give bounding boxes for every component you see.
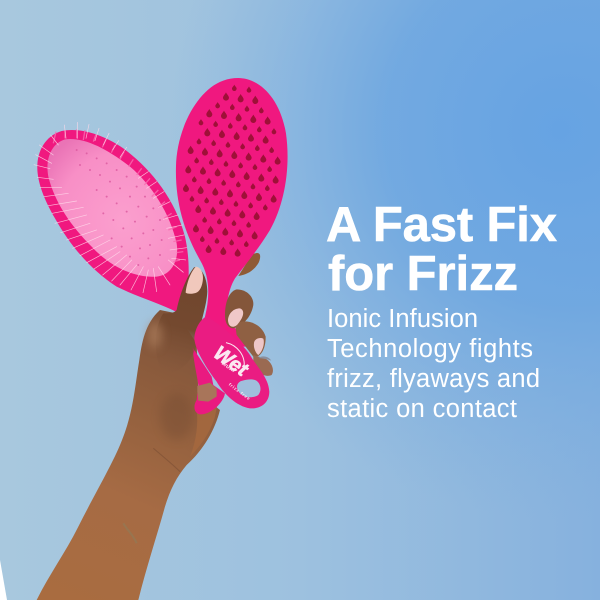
body text: static on contact bbox=[327, 395, 517, 423]
brand logo bbox=[209, 342, 253, 402]
headline: for Frizz bbox=[328, 247, 518, 301]
large vent holes bbox=[183, 92, 281, 257]
left brush handle and loop bbox=[193, 347, 225, 414]
fingernails bbox=[228, 308, 271, 361]
brand logo: brush bbox=[220, 361, 236, 375]
arm and palm bbox=[37, 310, 220, 600]
rim notches bbox=[53, 129, 183, 262]
body text: frizz, flyaways and bbox=[327, 365, 540, 393]
finger behind brush head bbox=[238, 253, 260, 276]
hand and held brushes bbox=[34, 78, 288, 600]
brush: bristle side bbox=[34, 122, 189, 312]
cushion bbox=[47, 139, 177, 277]
brand logo: frizz free bbox=[228, 382, 252, 402]
body text: Ionic Infusion bbox=[327, 305, 478, 333]
brush: vented side bbox=[176, 78, 288, 347]
small vent holes bbox=[190, 85, 276, 247]
brush head with cushion bbox=[34, 122, 189, 312]
thumb bbox=[148, 267, 207, 373]
headline bbox=[326, 198, 557, 301]
brand logo: Wet bbox=[209, 342, 253, 382]
fingers bbox=[225, 289, 273, 376]
headline: A Fast Fix bbox=[326, 198, 557, 252]
pin dots bbox=[76, 149, 163, 266]
body text: Technology fights bbox=[327, 335, 533, 363]
body text bbox=[327, 305, 540, 423]
brush handle with logo bbox=[194, 316, 269, 408]
pins bbox=[34, 122, 187, 293]
